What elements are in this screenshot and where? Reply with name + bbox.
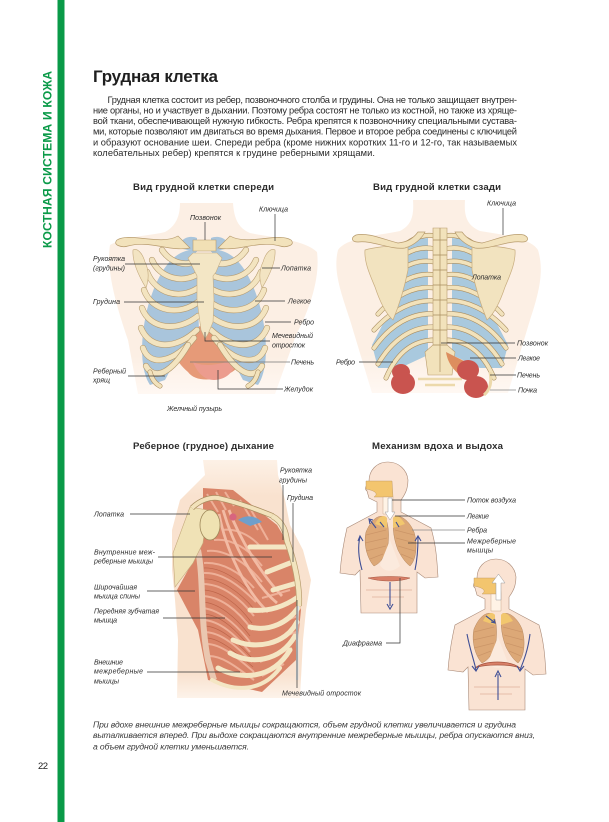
back view labels: Легкое: [517, 356, 540, 362]
side view labels: Лопатка: [93, 512, 124, 518]
heading: front view: Вид грудной клетки спереди: [133, 182, 274, 193]
side view labels: реберные мышцы: [93, 558, 154, 566]
caption: выталкивается вперед. При выдохе сокращаются внутренние межреберные мышцы, ребра опускаются вниз,: [93, 730, 535, 740]
heading: mechanism: Механизм вдоха и выдоха: [372, 441, 504, 452]
chapter title vertical: КОСТНАЯ СИСТЕМА И КОЖА: [40, 71, 54, 248]
panel: back view of rib cage: [336, 182, 549, 398]
illustration: front rib cage: [109, 203, 318, 394]
side view labels: мышца спины: [94, 594, 141, 600]
caption: При вдохе внешние межреберные мышцы сокращаются, объем грудной клетки увеличивается и грудина: [93, 720, 516, 730]
front view labels: Грудина: [93, 298, 120, 306]
side view labels: мышцы: [94, 678, 120, 686]
front view labels: Рукоятка: [93, 256, 125, 263]
front view labels: Ребро: [294, 318, 314, 326]
side view labels: Грудина: [287, 494, 313, 502]
intro text block: колебательных ребер) крепятся к грудине реберными хрящами.: [93, 148, 375, 158]
illustration: back rib cage: [336, 200, 541, 398]
intro text block: ми, которые позволяют им двигаться во время дыхания. Первое и второе ребра соединены с ключицей: [93, 127, 517, 137]
intro text block: [93, 95, 517, 158]
intro text block: и образуют основание шеи. Спереди ребра (кроме нижних коротких 11-го и 12-го, так называемых: [93, 137, 517, 147]
front view labels: Лопатка: [280, 266, 311, 272]
green side bar: [58, 0, 64, 822]
front view labels: Мечевидный: [272, 332, 313, 340]
side view labels: Внешние: [94, 660, 123, 666]
back view labels: Ребро: [336, 358, 355, 366]
caption: [93, 720, 535, 752]
illustration: exhale figure: [448, 559, 546, 710]
side view labels: мышца: [94, 618, 117, 624]
back view labels: Печень: [517, 372, 540, 380]
mechanism labels: мышцы: [467, 548, 494, 554]
intro text block: ние органы, но и участвует в дыхании. Поэтому ребра состоят не только из костной, но также из хряще-: [93, 106, 517, 116]
front view labels: Ключица: [259, 206, 288, 214]
back view labels: Почка: [518, 388, 537, 394]
heading: costal breathing: Реберное (грудное) дыхание: [133, 441, 274, 452]
mechanism labels: Легкие: [466, 514, 489, 520]
side view labels: Мечевидный отросток: [282, 690, 362, 698]
heading: back view: Вид грудной клетки сзади: [373, 182, 501, 193]
illustration: inhale figure: [340, 462, 438, 613]
front view labels: [92, 206, 314, 413]
front view labels: Легкое: [287, 298, 311, 306]
mechanism labels: [342, 496, 516, 648]
back view labels: Позвонок: [517, 340, 549, 348]
mechanism labels: Диафрагма: [342, 640, 382, 648]
front view labels: Реберный: [93, 368, 126, 376]
mechanism labels: Межреберные: [467, 538, 516, 546]
back view labels: Ключица: [487, 200, 516, 208]
side view labels: межреберные: [94, 668, 143, 676]
side view labels: Внутренние меж-: [94, 550, 156, 556]
front view labels: Печень: [291, 360, 314, 366]
front view labels: Желудок: [283, 386, 314, 394]
back view labels: Лопатка: [471, 274, 501, 282]
front view labels: Позвонок: [190, 215, 222, 222]
back view labels: [336, 200, 549, 394]
title: Грудная клетка: [93, 67, 219, 86]
panel: costal breathing: [93, 441, 362, 698]
front view labels: (грудины): [93, 264, 125, 272]
mechanism labels: Ребра: [467, 526, 487, 534]
front view labels: отросток: [272, 342, 306, 350]
caption: а объем грудной клетки уменьшается.: [93, 742, 249, 752]
side view labels: [93, 468, 362, 698]
mechanism labels: Поток воздуха: [467, 496, 516, 504]
side view labels: Широчайшая: [94, 584, 137, 592]
side view labels: Рукоятка: [280, 468, 312, 474]
front view labels: Желчный пузырь: [166, 405, 222, 413]
panel: front view of rib cage: [92, 182, 318, 413]
page number: 22: [38, 761, 48, 772]
intro text block: вой ткани, обеспечивающей нужную гибкость. Ребра крепятся к позвоночнику специальными сустава-: [93, 116, 517, 126]
side view labels: грудины: [279, 476, 308, 484]
front view labels: хрящ: [92, 378, 110, 384]
side view labels: Передняя зубчатая: [94, 608, 159, 616]
illustration: side view muscles: [172, 460, 311, 698]
intro text block: Грудная клетка состоит из ребер, позвоночного столба и грудины. Она не только защищает внутрен-: [108, 95, 517, 105]
panel: inhale and exhale mechanism: [340, 441, 546, 710]
